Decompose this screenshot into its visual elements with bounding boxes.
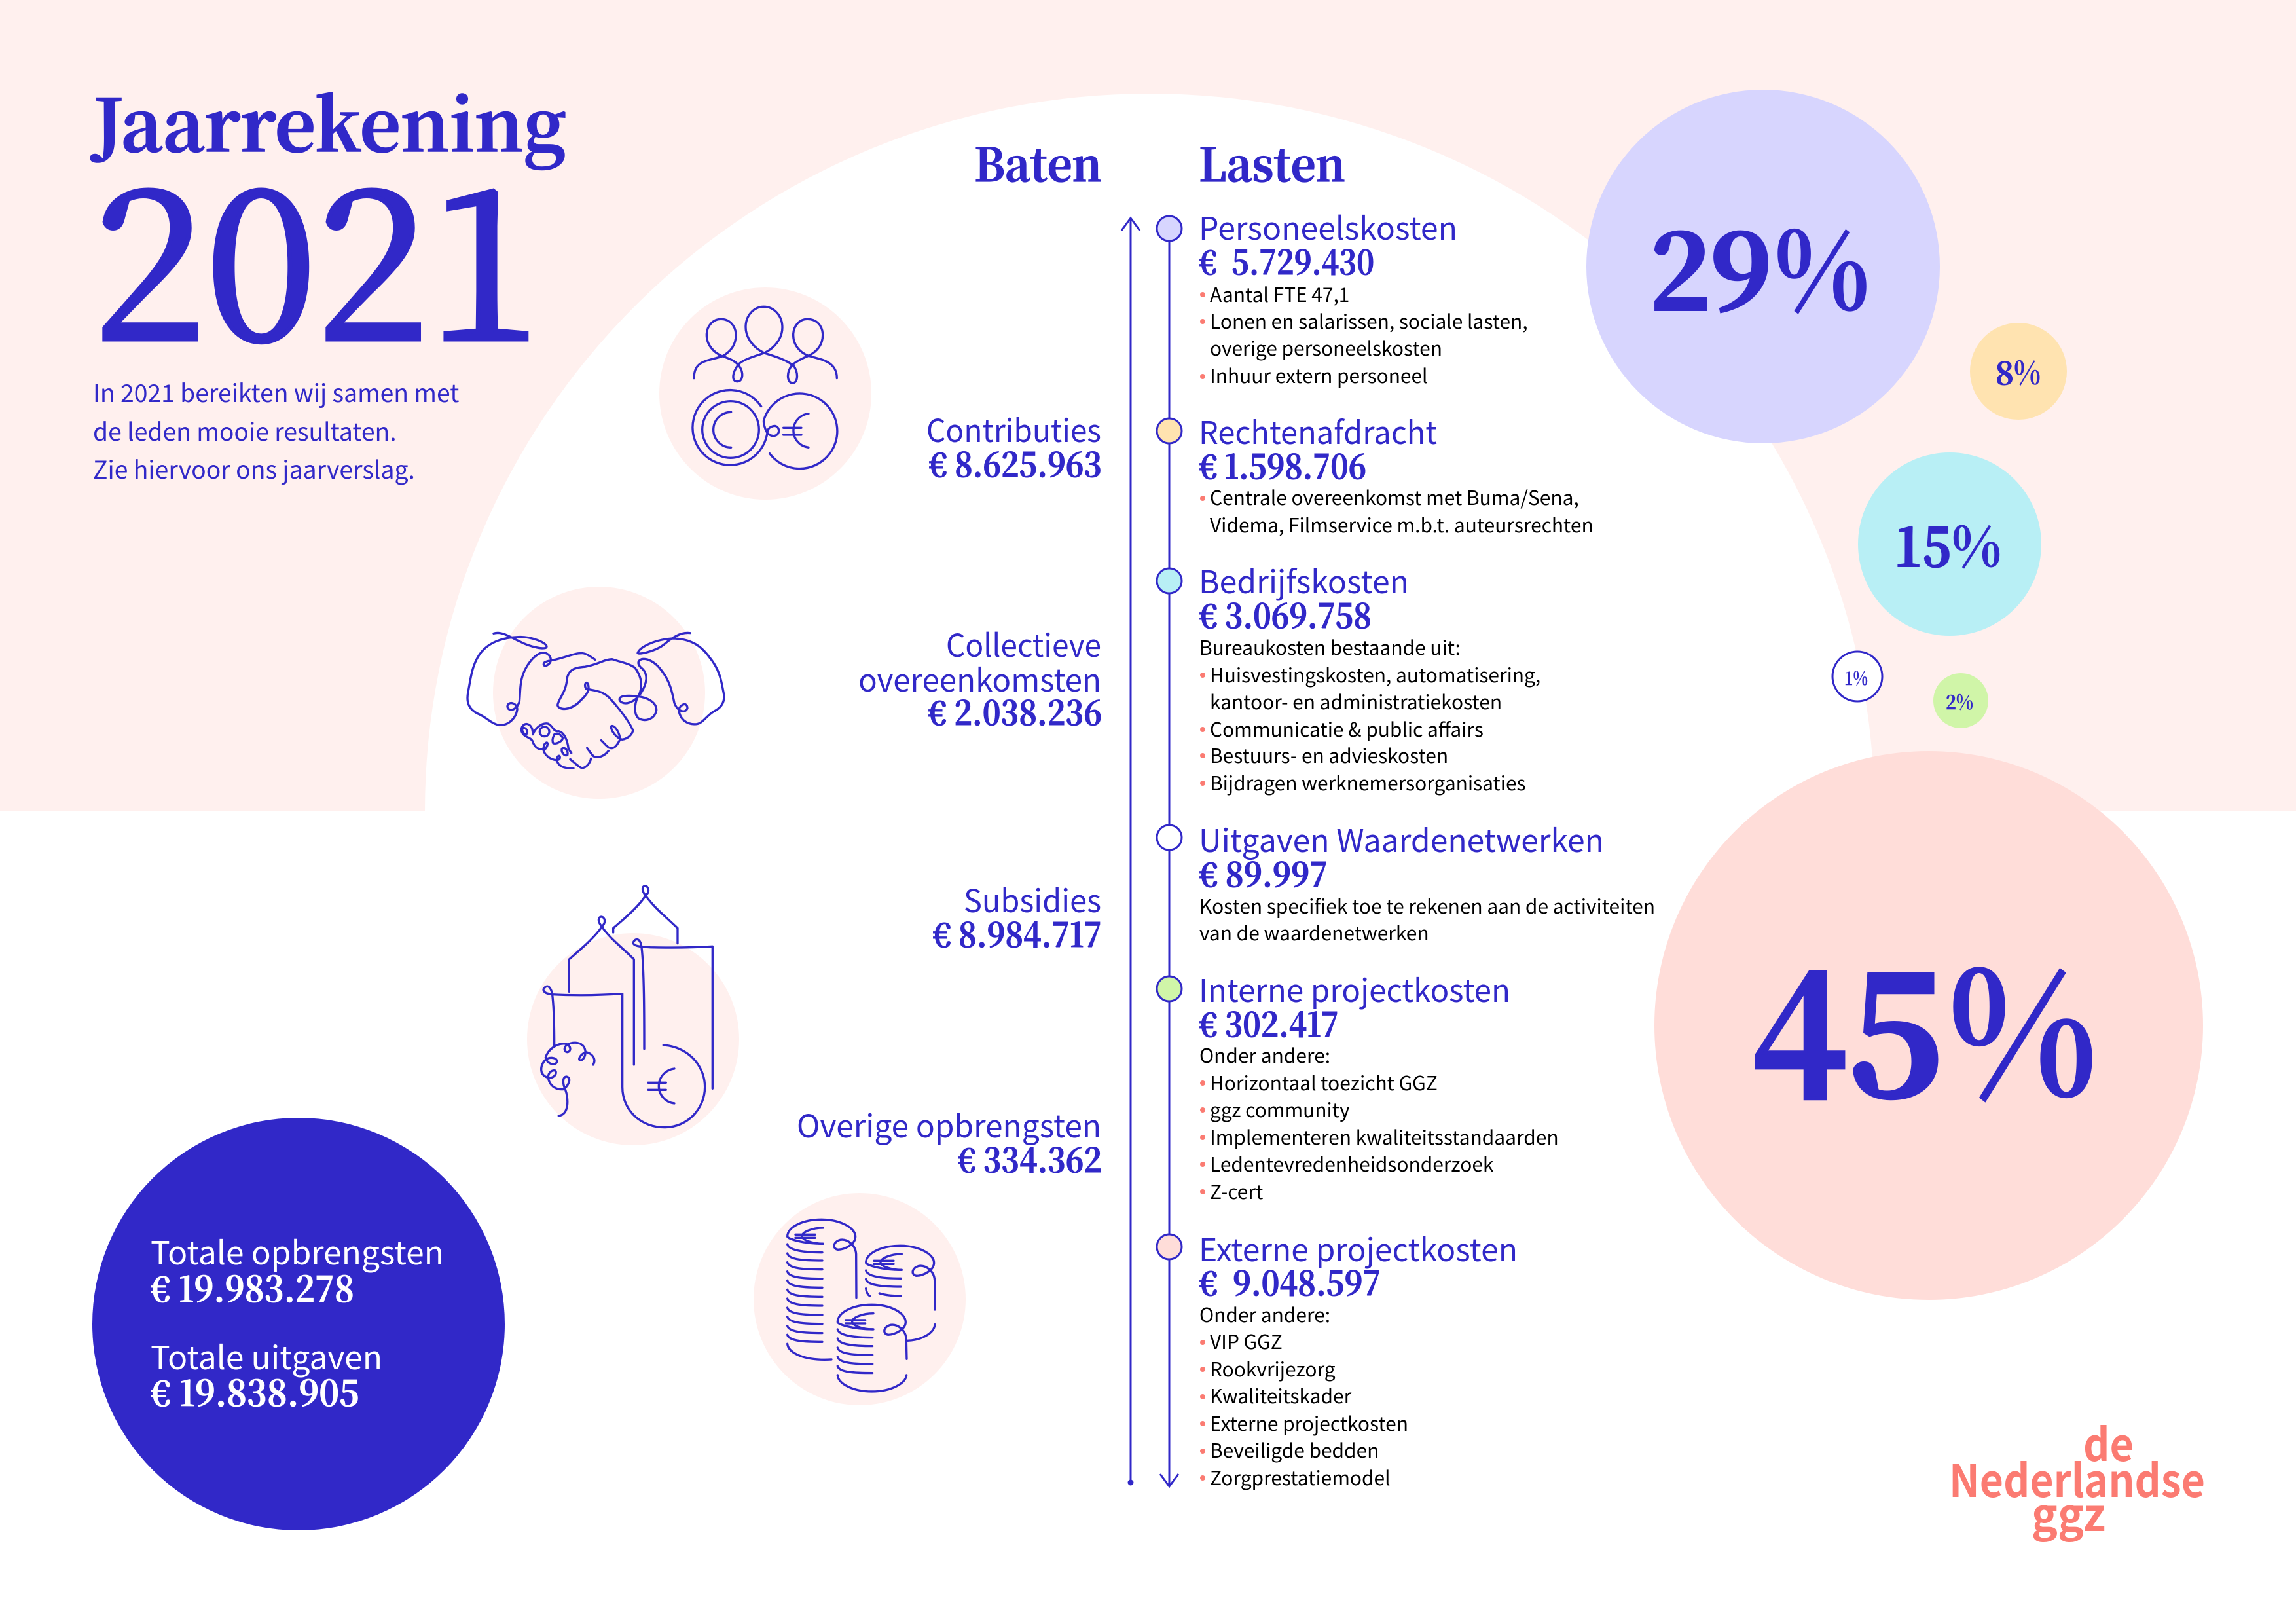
baten: Subsidies: € 8.984.717: [933, 908, 1102, 957]
lasten: Uitgaven Waardenetwerken: van de waardenetwerken: [1199, 917, 1429, 946]
lasten: Personeelskosten: Personeelskosten: [1199, 203, 1457, 249]
logo: de Nederlandse ggz: Nederlandse: [1949, 1445, 2205, 1510]
baten: Collectieve overeenkomsten: [858, 620, 1102, 735]
lasten: Rechtenafdracht: Videma, Filmservice m.b.t. auteursrechten: [1210, 509, 1594, 538]
lasten: Externe projectkosten: Beveiligde bedden: [1210, 1435, 1379, 1464]
lasten: Externe projectkosten: Rookvrijezorg: [1210, 1354, 1336, 1382]
lasten: Rechtenafdracht: Rechtenafdracht: [1199, 407, 1437, 453]
lasten: Rechtenafdracht: € 1.598.706: [1199, 440, 1366, 489]
baten: Overige opbrengsten: Overige opbrengsten: [797, 1101, 1101, 1147]
percentage bubble: 8%: 8: [1995, 348, 2014, 394]
lasten: Bedrijfskosten: Bedrijfskosten: [1199, 557, 1409, 602]
timeline dot: waardenetwerken: [1157, 825, 1182, 850]
baten: Contributies: Contributies: [926, 405, 1101, 451]
percentage bubble: 2%: [1933, 673, 1988, 728]
lasten: Personeelskosten: [1199, 203, 1528, 389]
percentage bubble: 29%: %: [1774, 186, 1870, 341]
icon: coin stacks: [754, 1193, 966, 1405]
percentage bubble: 45%: [1654, 751, 2203, 1300]
intro text: Zie hiervoor ons jaarverslag.: [93, 451, 415, 486]
icon: buildings and euro: [527, 886, 739, 1145]
background: pink band with white arch: [0, 0, 2296, 811]
percentage bubble: 8%: [1970, 323, 2067, 420]
baten: Collectieve overeenkomsten: overeenkomsten: [858, 655, 1101, 701]
lasten: Bedrijfskosten: € 3.069.758: [1199, 589, 1372, 638]
percentage bubble: 29%: 29: [1650, 186, 1772, 341]
baten: Overige opbrengsten: [797, 1101, 1102, 1182]
lasten: Interne projectkosten: Ledentevredenheidsonderzoek: [1210, 1149, 1494, 1177]
timeline dot: externe projectkosten: [1157, 1234, 1182, 1259]
logo: de Nederlandse ggz: ggz: [2032, 1479, 2105, 1544]
lasten: Externe projectkosten: Externe projectkosten: [1210, 1408, 1408, 1437]
percentage bubble: 1%: [1832, 652, 1882, 701]
intro text: In 2021 bereikten wij samen met: [93, 374, 459, 409]
timeline dot: personeelskosten: [1157, 216, 1182, 241]
lasten: Bedrijfskosten: Bijdragen werknemersorganisaties: [1210, 767, 1526, 796]
totals circle: € 19.983.278: [151, 1262, 354, 1312]
lasten: Bedrijfskosten: kantoor- en administratiekosten: [1210, 686, 1502, 715]
lasten: Interne projectkosten: ggz community: [1210, 1094, 1350, 1123]
timeline dot: bedrijfskosten: [1157, 568, 1182, 593]
column heading: Lasten: Lasten: [1199, 129, 1345, 195]
lasten: Bedrijfskosten: [1199, 557, 1540, 796]
lasten: Bedrijfskosten: Bestuurs- en advieskosten: [1210, 740, 1448, 769]
lasten: Externe projectkosten: Kwaliteitskader: [1210, 1380, 1352, 1409]
lasten: Externe projectkosten: Externe projectkosten: [1199, 1225, 1518, 1270]
lasten: Personeelskosten: € 5.729.430: [1199, 236, 1374, 284]
lasten: Personeelskosten: overige personeelskosten: [1210, 333, 1442, 361]
lasten: Externe projectkosten: VIP GGZ: [1210, 1326, 1283, 1355]
logo: de Nederlandse ggz: de: [2083, 1409, 2134, 1474]
lasten: Interne projectkosten: Onder andere:: [1199, 1040, 1330, 1069]
lasten: Interne projectkosten: [1199, 965, 1559, 1205]
percentage bubble: 15%: 15: [1894, 504, 1951, 583]
percentage bubble: 29%: [1586, 90, 1940, 443]
lasten: Externe projectkosten: € 9.048.597: [1199, 1257, 1381, 1305]
lasten: Personeelskosten: Lonen en salarissen, sociale lasten,: [1210, 306, 1528, 335]
title: 2021: [94, 100, 540, 399]
percentage bubble: 45%: %: [1948, 900, 2098, 1145]
totals circle: [92, 1118, 505, 1530]
icon: members and coins: [659, 287, 871, 500]
baten: Contributies: € 8.625.963: [929, 438, 1102, 487]
lasten: Interne projectkosten: € 302.417: [1199, 998, 1339, 1046]
percentage bubble: 15%: [1858, 452, 2041, 636]
arrow: lasten timeline: [1160, 229, 1178, 1486]
timeline dot: rechtenafdracht: [1157, 418, 1182, 443]
lasten: Interne projectkosten: Interne projectkosten: [1199, 965, 1510, 1011]
totals circle: Totale opbrengsten: [151, 1228, 444, 1274]
baten: Subsidies: Subsidies: [964, 876, 1101, 921]
totals circle: Totale uitgaven: [151, 1333, 382, 1379]
lasten: Personeelskosten: Inhuur extern personeel: [1210, 360, 1428, 389]
percentage bubble: 45%: 45: [1752, 900, 1943, 1145]
baten: Subsidies: [933, 876, 1102, 957]
column heading: Baten: Baten: [974, 129, 1102, 195]
lasten: Bedrijfskosten: Huisvestingskosten, automatisering,: [1210, 659, 1540, 688]
lasten: Bedrijfskosten: Communicatie & public affairs: [1210, 714, 1484, 743]
logo: de Nederlandse ggz: [1949, 1409, 2205, 1544]
lasten: Rechtenafdracht: [1199, 407, 1594, 538]
lasten: Interne projectkosten: Implementeren kwaliteitsstandaarden: [1210, 1122, 1559, 1151]
lasten: Personeelskosten: Aantal FTE 47,1: [1210, 279, 1349, 308]
percentage bubble: 2%: 2%: [1946, 686, 1973, 715]
totals circle: € 19.838.905: [151, 1366, 359, 1416]
lasten: Uitgaven Waardenetwerken: Uitgaven Waardenetwerken: [1199, 815, 1604, 861]
percentage bubble: 8%: %: [2014, 348, 2041, 394]
lasten: Rechtenafdracht: Centrale overeenkomst met Buma/Sena,: [1210, 482, 1579, 511]
intro text: [93, 374, 459, 486]
lasten: Uitgaven Waardenetwerken: Kosten specifiek toe te rekenen aan de activiteiten: [1199, 891, 1655, 919]
baten: Contributies: [926, 405, 1102, 487]
arrow: baten timeline: [1121, 218, 1140, 1485]
title: Jaarrekening: [90, 69, 566, 172]
lasten: Externe projectkosten: Onder andere:: [1199, 1299, 1330, 1328]
lasten: Externe projectkosten: [1199, 1225, 1518, 1491]
baten: Collectieve overeenkomsten: Collectieve: [946, 620, 1101, 666]
lasten: Interne projectkosten: Horizontaal toezicht GGZ: [1210, 1067, 1438, 1096]
lasten: Externe projectkosten: Zorgprestatiemodel: [1210, 1462, 1391, 1491]
percentage bubble: 1%: 1%: [1844, 665, 1868, 691]
percentage bubble: 15%: %: [1952, 504, 2001, 583]
baten: Overige opbrengsten: € 334.362: [958, 1134, 1102, 1182]
lasten: Uitgaven Waardenetwerken: € 89.997: [1199, 848, 1328, 896]
lasten: Uitgaven Waardenetwerken: [1199, 815, 1655, 946]
baten: Collectieve overeenkomsten: € 2.038.236: [928, 686, 1102, 735]
timeline dot: interne projectkosten: [1157, 976, 1182, 1001]
lasten: Interne projectkosten: Z-cert: [1210, 1176, 1263, 1205]
intro text: de leden mooie resultaten.: [93, 413, 397, 448]
icon: handshake: [467, 587, 724, 799]
lasten: Bedrijfskosten: Bureaukosten bestaande uit:: [1199, 632, 1461, 661]
